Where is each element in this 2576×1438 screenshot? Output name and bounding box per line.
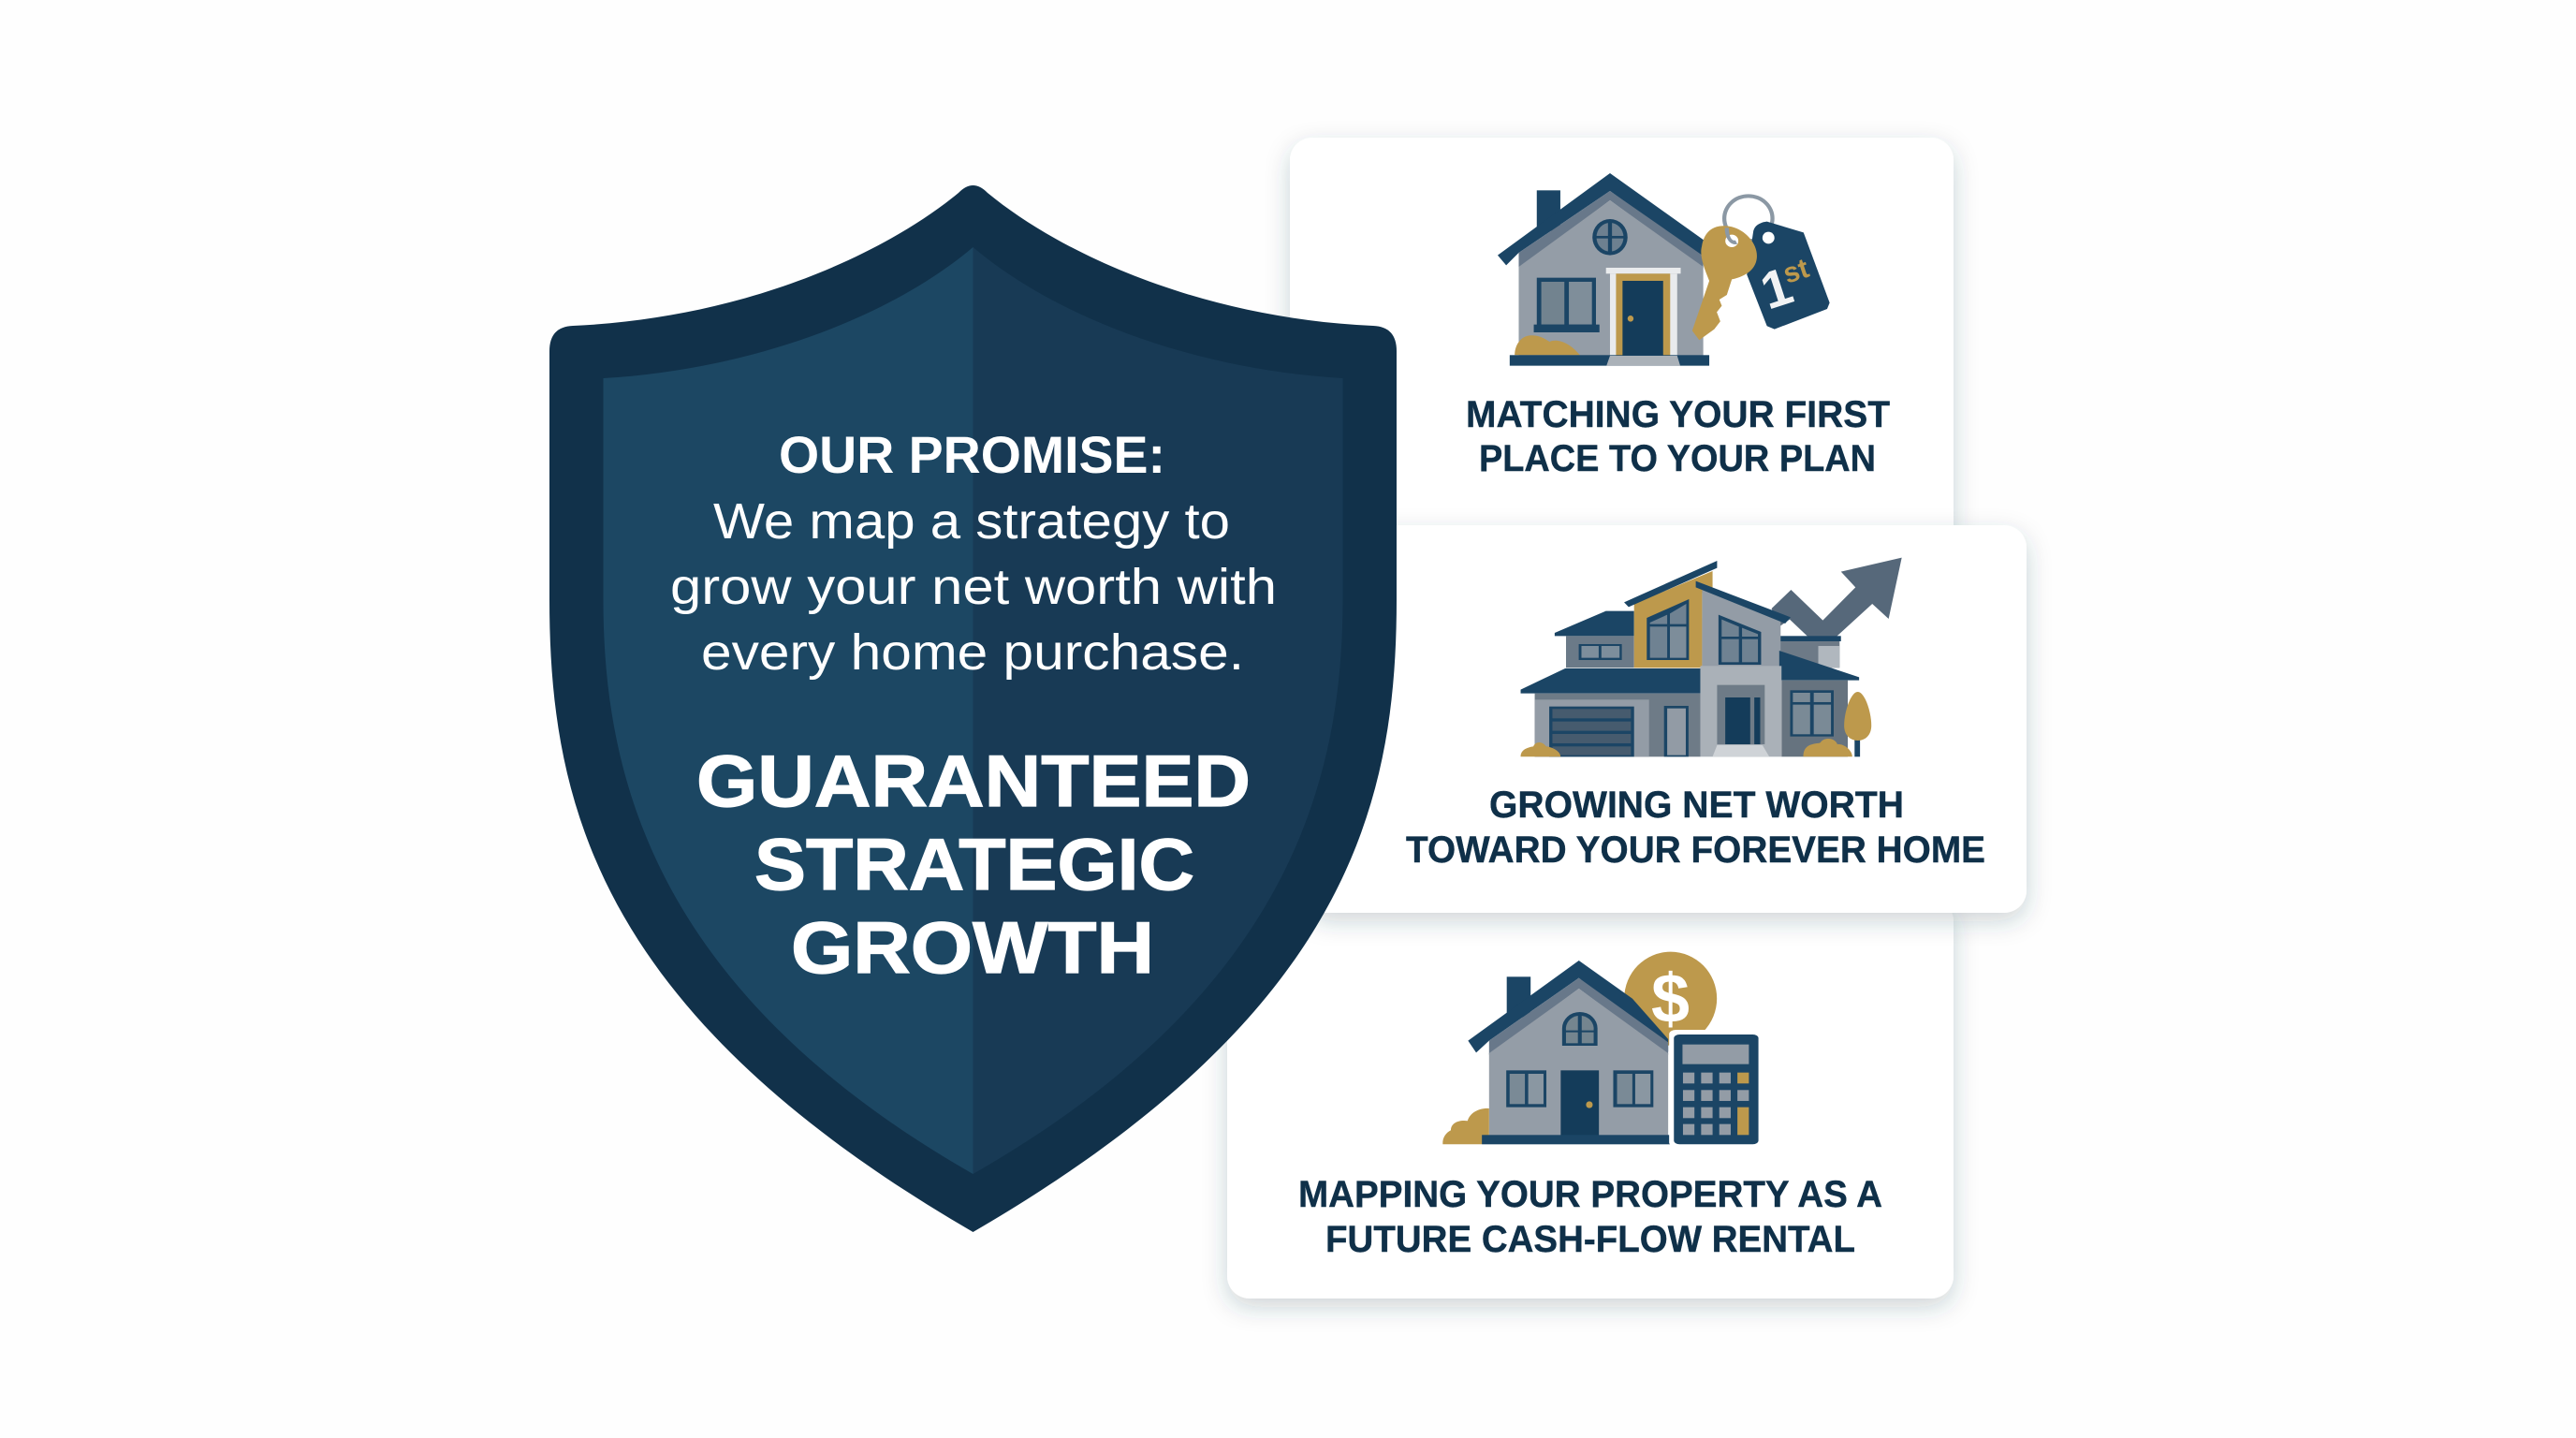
label: 1st on tag: 1 bbox=[1753, 256, 1799, 320]
panel: rental card bbox=[1227, 899, 1954, 1299]
shield outer rim bbox=[549, 185, 1397, 1232]
caption: net worth: TOWARD YOUR FOREVER HOME bbox=[1406, 829, 1985, 871]
promise text bbox=[670, 425, 1277, 681]
panel: shield bbox=[549, 185, 1397, 1232]
panel: net worth card bbox=[1306, 525, 2027, 913]
headline: guaranteed strategic growth: GROWTH bbox=[791, 906, 1154, 989]
headline: guaranteed strategic growth bbox=[696, 740, 1251, 989]
headline: guaranteed strategic growth: STRATEGIC bbox=[754, 823, 1194, 905]
caption: net worth: GROWING NET WORTH bbox=[1489, 785, 1904, 826]
label: 1st on tag: st bbox=[1779, 253, 1813, 290]
promise text: every home purchase. bbox=[701, 624, 1244, 681]
caption: rental: MAPPING YOUR PROPERTY AS A bbox=[1298, 1174, 1882, 1215]
caption: first home: PLACE TO YOUR PLAN bbox=[1479, 438, 1876, 479]
label: dollar sign: $ bbox=[1651, 960, 1690, 1037]
icon: modern house with growth arrow bbox=[1521, 558, 1902, 756]
caption: net worth bbox=[1406, 785, 1985, 871]
shield inner left half bbox=[603, 247, 973, 1174]
caption: first home: MATCHING YOUR FIRST bbox=[1466, 394, 1890, 435]
panel: first home card bbox=[1290, 138, 1954, 550]
promise text: grow your net worth with bbox=[670, 559, 1277, 615]
headline: guaranteed strategic growth: GUARANTEED bbox=[696, 740, 1251, 822]
caption: rental: FUTURE CASH-FLOW RENTAL bbox=[1325, 1219, 1855, 1260]
caption: first home bbox=[1466, 394, 1890, 479]
icon: starter house with key and 1st tag bbox=[1498, 173, 1830, 366]
caption: rental bbox=[1298, 1174, 1882, 1260]
promise text: We map a strategy to bbox=[713, 493, 1230, 550]
promise text: OUR PROMISE: bbox=[779, 425, 1165, 484]
icon: house with coin and calculator bbox=[1442, 952, 1763, 1147]
shield inner right half bbox=[973, 247, 1342, 1174]
